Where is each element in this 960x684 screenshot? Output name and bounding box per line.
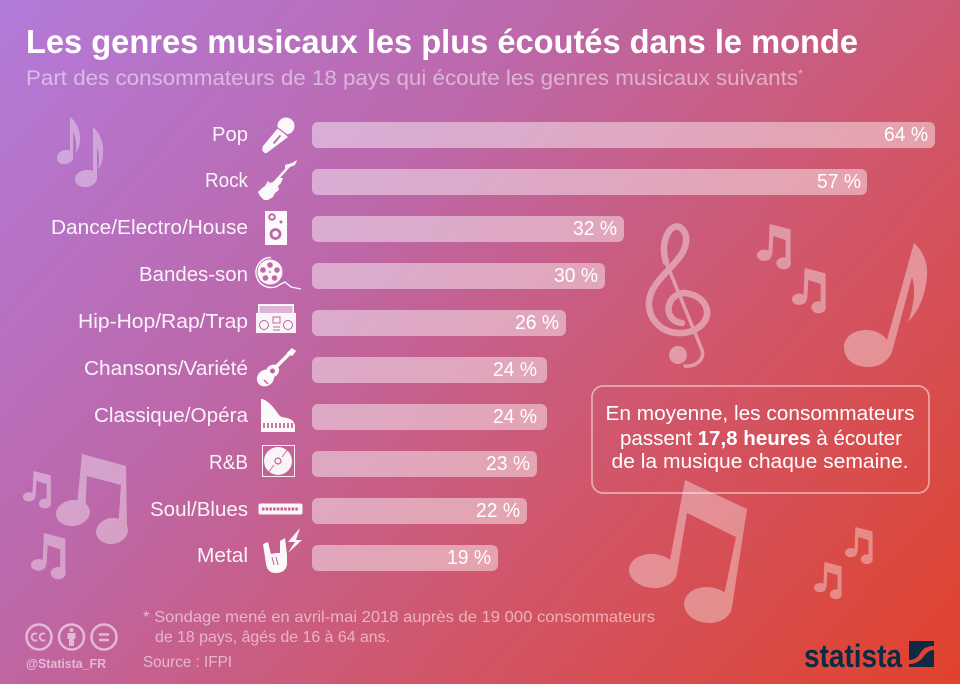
row: Pop: Pop [212, 124, 248, 146]
icon: grand piano [261, 399, 295, 432]
row: R&B [209, 451, 537, 477]
row: Classique/Opéra: 24 % [493, 406, 537, 428]
row: Pop: 64 % [884, 124, 928, 146]
row: Soul/Blues: 22 % [476, 500, 520, 522]
row: Classique/Opéra: Classique/Opéra [94, 405, 249, 427]
footnote [143, 609, 655, 646]
row: Chansons/Variété: 24 % [493, 359, 537, 381]
row: Pop [212, 122, 935, 148]
statista logo: statista [804, 638, 902, 674]
callout: passent 17,8 heures à écouter [620, 428, 902, 450]
callout: En moyenne, les consommateurs [606, 403, 914, 425]
row: Bandes-son: 30 % [554, 265, 598, 287]
icon: boombox [256, 304, 296, 333]
row: R&B: R&B [209, 452, 248, 474]
icon: microphone [262, 118, 294, 153]
row: Hip-Hop/Rap/Trap [78, 310, 566, 336]
callout [592, 386, 929, 493]
decorative notes: bottom right [628, 480, 873, 625]
icon: acoustic guitar [253, 349, 295, 390]
icon: speaker [265, 211, 287, 245]
decorative note cluster: left [23, 454, 130, 579]
subtitle asterisk: * [798, 67, 803, 81]
row: Rock: Rock [205, 170, 249, 192]
row: Soul/Blues: Soul/Blues [150, 499, 248, 521]
row: Rock [205, 169, 867, 195]
icon: rock hand and lightning [263, 528, 302, 573]
decorative note: top left [57, 117, 103, 187]
icon: harmonica [258, 504, 302, 514]
row: Hip-Hop/Rap/Trap: 26 % [515, 312, 559, 334]
row: Hip-Hop/Rap/Trap: Hip-Hop/Rap/Trap [78, 311, 248, 333]
decorative notes: top right [757, 224, 927, 367]
row: Dance/Electro/House [51, 216, 624, 242]
icon: film reel [256, 258, 301, 289]
row: Chansons/Variété [84, 357, 547, 383]
footnote: * Sondage mené en avril-mai 2018 auprès de 19 000 consommateurs [143, 609, 655, 626]
source: Source : IFPI [143, 654, 232, 671]
icon: electric guitar [258, 160, 297, 200]
icon: vinyl CD [262, 446, 294, 476]
row: Classique/Opéra [94, 404, 547, 430]
row: Bandes-son [139, 263, 605, 289]
row: Chansons/Variété: Chansons/Variété [84, 358, 248, 380]
row: Dance/Electro/House: 32 % [573, 218, 617, 240]
decorative treble clef [649, 226, 707, 366]
title: Les genres musicaux les plus écoutés dans le monde [26, 23, 858, 60]
footnote: de 18 pays, âgés de 16 à 64 ans. [155, 629, 390, 646]
row: Metal: 19 % [447, 547, 491, 569]
row: Bandes-son: Bandes-son [139, 264, 248, 286]
row: Dance/Electro/House: Dance/Electro/House [51, 217, 248, 239]
creative commons icons [26, 624, 116, 650]
subtitle: Part des consommateurs de 18 pays qui écoute les genres musicaux suivants [26, 67, 798, 90]
row: Metal [197, 545, 498, 571]
row: Soul/Blues [150, 498, 527, 524]
callout: de la musique chaque semaine. [612, 451, 908, 473]
row: Rock: 57 % [817, 171, 861, 193]
row: R&B: 23 % [486, 453, 530, 475]
handle: @Statista_FR [26, 656, 107, 671]
row: Metal: Metal [197, 545, 248, 567]
bar chart [51, 122, 935, 571]
